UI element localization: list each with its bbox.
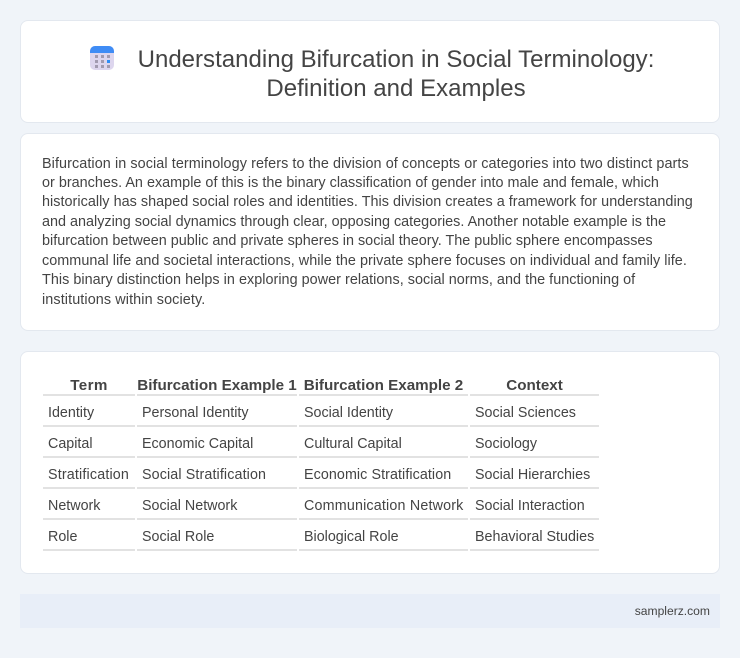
table row: Role bbox=[43, 529, 599, 551]
table row: Network: Network bbox=[48, 498, 100, 514]
table row: Stratification: Economic Stratification bbox=[304, 467, 451, 483]
panel: table bbox=[20, 351, 720, 574]
title: Definition and Examples bbox=[266, 75, 526, 102]
table header: Context bbox=[506, 377, 563, 394]
panel: header bbox=[20, 20, 720, 123]
text block: description bbox=[42, 156, 693, 308]
text block: description: Bifurcation in social terminology refers to the division of concepts or categories into two distinct parts bbox=[42, 156, 689, 172]
footer bar bbox=[20, 594, 720, 628]
title bbox=[138, 46, 654, 102]
table header: Bifurcation Example 2 bbox=[304, 377, 463, 394]
table row: Identity: Social Sciences bbox=[475, 405, 576, 421]
text block: description: historically has shaped social roles and identities. This division creates a framework for understanding bbox=[42, 194, 693, 210]
table row: Stratification: Stratification bbox=[48, 467, 129, 483]
text block: description: or branches. An example of this is the binary classification of gender into male and female, which bbox=[42, 175, 659, 191]
text block: description: communal life and societal interactions, while the private sphere focuses on individual and family life. bbox=[42, 253, 687, 269]
table header: Term bbox=[70, 377, 108, 394]
table row: Capital: Economic Capital bbox=[142, 436, 253, 452]
footer text: samplerz.com bbox=[635, 604, 710, 618]
table row: Role: Behavioral Studies bbox=[475, 529, 594, 545]
text block: description: institutions within society. bbox=[42, 292, 205, 308]
table header: Bifurcation Example 1 bbox=[137, 377, 297, 394]
text block: description: bifurcation between public and private spheres in social theory. The public sphere encompasses bbox=[42, 233, 653, 249]
table row: Network bbox=[43, 498, 599, 520]
table row: Identity: Social Identity bbox=[304, 405, 393, 421]
table row: Role: Social Role bbox=[142, 529, 214, 545]
table row: Capital bbox=[43, 436, 599, 458]
table row: Capital: Cultural Capital bbox=[304, 436, 402, 452]
table row: Network: Communication Network bbox=[304, 498, 464, 514]
table row: Stratification: Social Stratification bbox=[142, 467, 266, 483]
table row: Identity: Identity bbox=[48, 405, 94, 421]
table row: Role: Role bbox=[48, 529, 77, 545]
table row: Network: Social Network bbox=[142, 498, 237, 514]
table row: Network: Social Interaction bbox=[475, 498, 585, 514]
table row: Capital: Sociology bbox=[475, 436, 537, 452]
table row: Capital: Capital bbox=[48, 436, 93, 452]
table row: Stratification: Social Hierarchies bbox=[475, 467, 590, 483]
text block: description: This binary distinction helps in exploring power relations, social norms, and the functioning of bbox=[42, 272, 635, 288]
table row: Identity bbox=[43, 405, 599, 427]
icon: calendar bbox=[90, 46, 114, 70]
table header bbox=[43, 377, 599, 396]
table row: Identity: Personal Identity bbox=[142, 405, 248, 421]
table row: Role: Biological Role bbox=[304, 529, 399, 545]
table row: Stratification bbox=[43, 467, 599, 489]
panel: intro text bbox=[20, 133, 720, 331]
text block: description: and analyzing social dynamics through clear, opposing categories. Another notable example is the bbox=[42, 214, 666, 230]
title: Understanding Bifurcation in Social Terminology: bbox=[138, 46, 654, 73]
